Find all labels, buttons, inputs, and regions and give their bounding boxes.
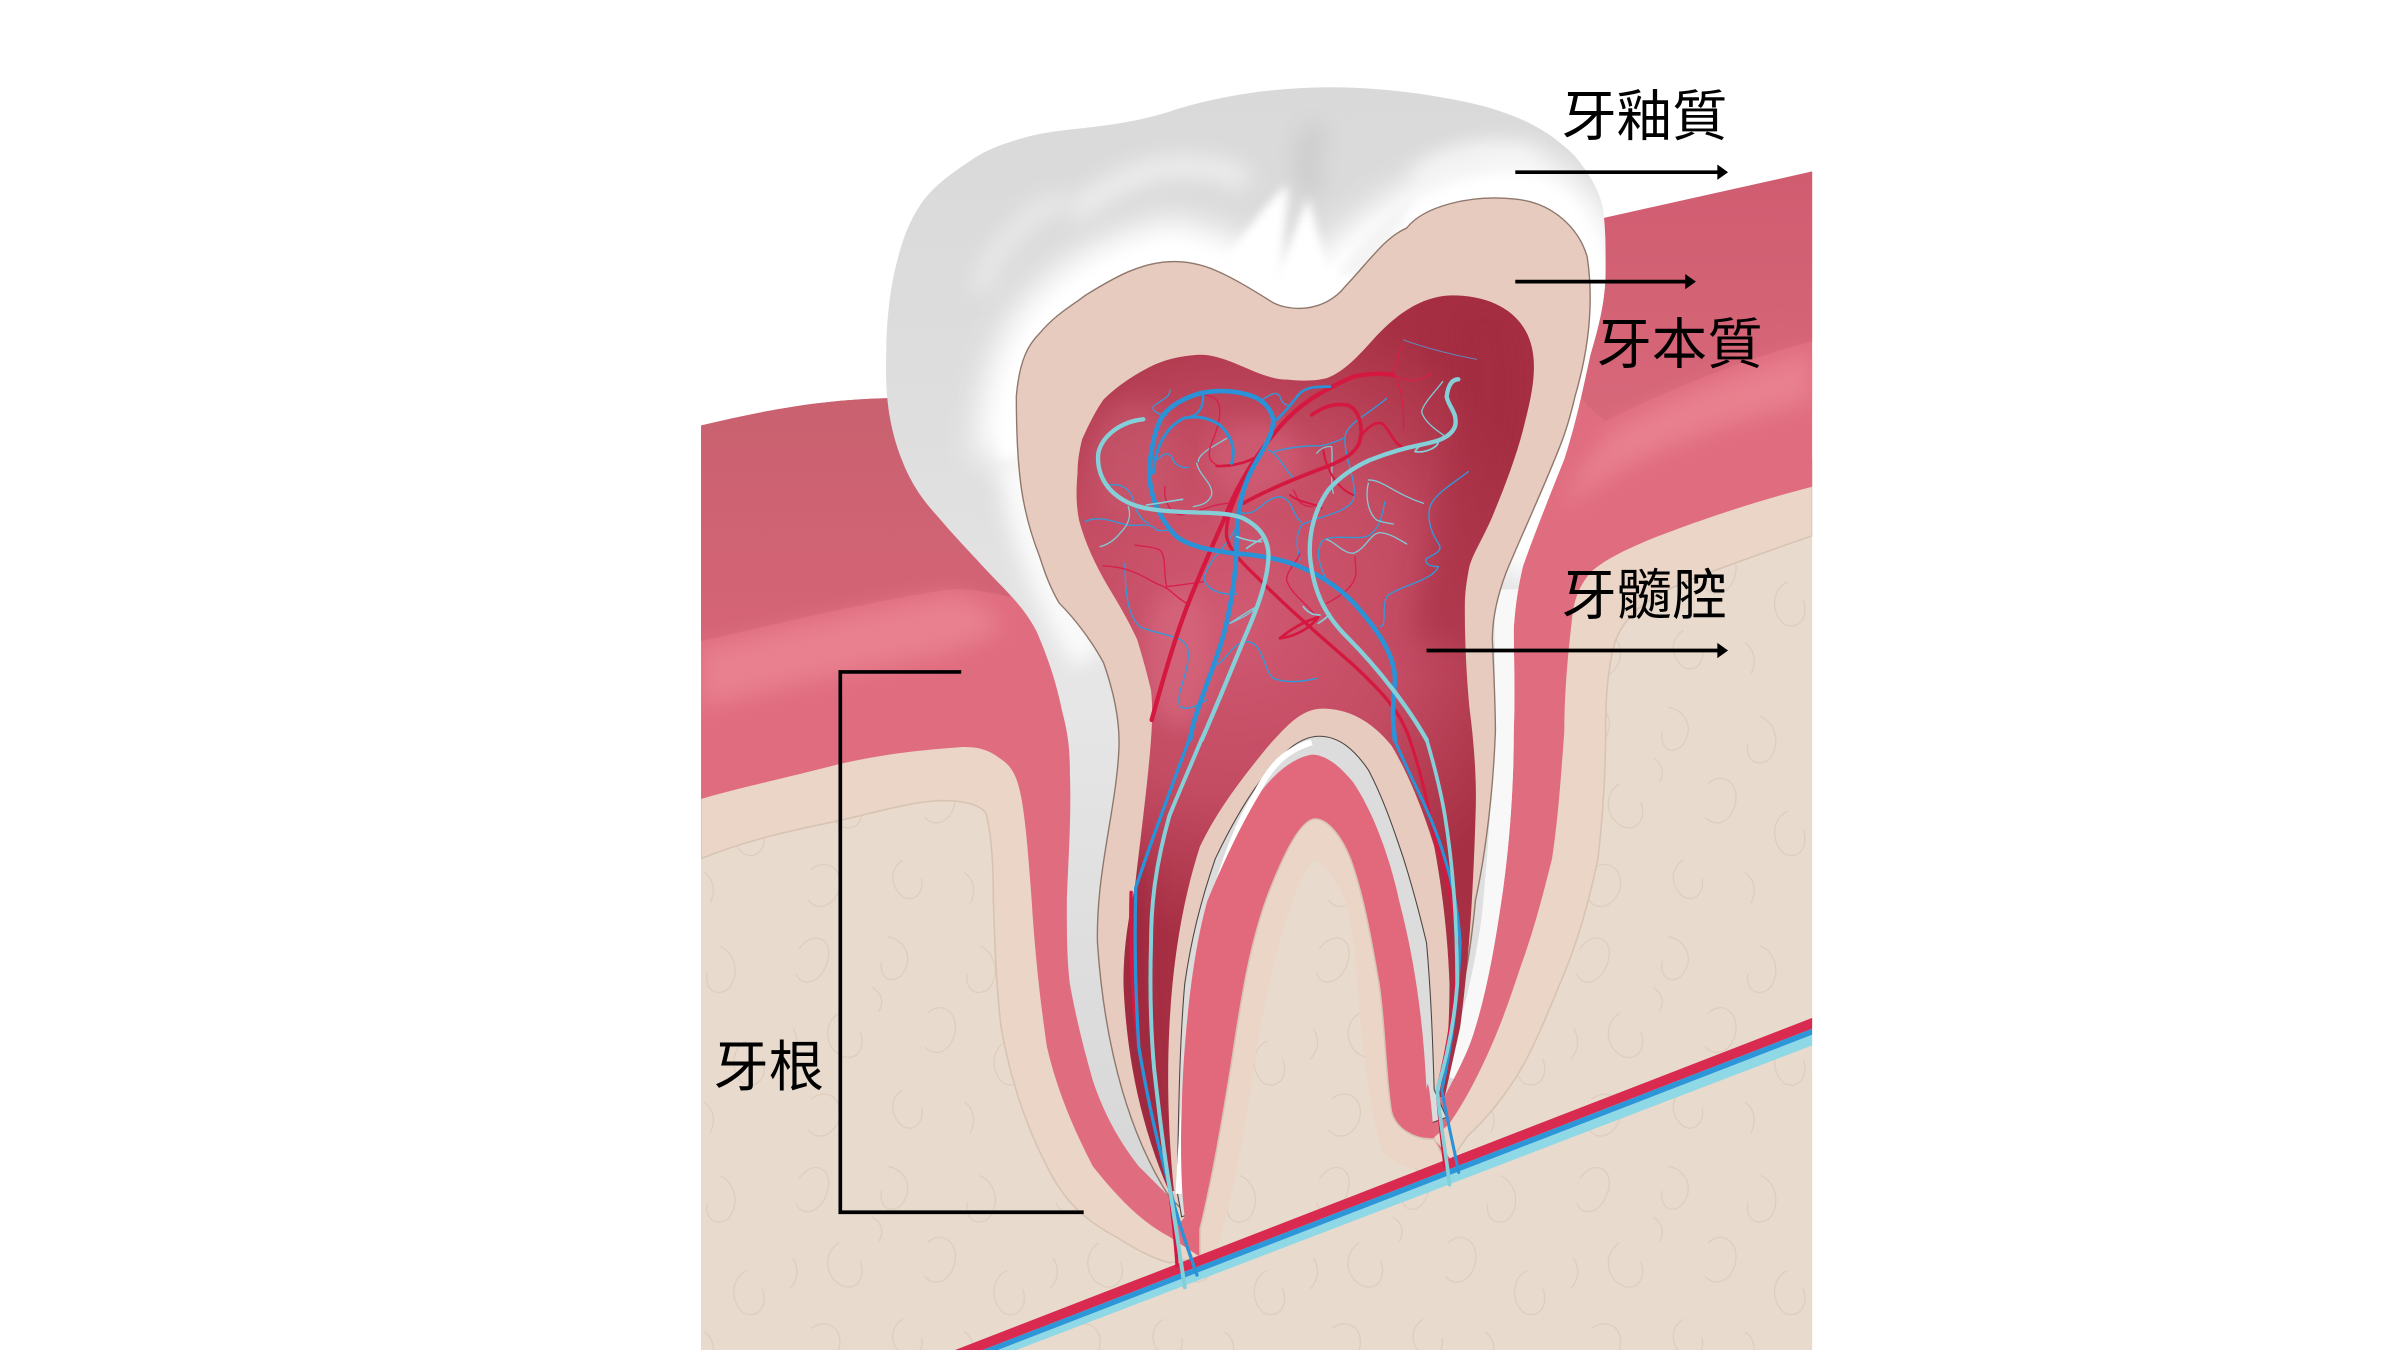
pulp blood vessels and nerves [1085, 340, 1477, 740]
left periosteum layer [701, 747, 1190, 1264]
bracket: root extent [840, 672, 1084, 1212]
left gum crest highlight [701, 596, 1003, 707]
root arch: enamel [1177, 736, 1446, 1217]
tooth anatomy diagram [701, 87, 1812, 1350]
cyan nerve trunks [1098, 379, 1458, 740]
root arch: periosteum [1200, 819, 1454, 1263]
right root blue [1394, 739, 1460, 1172]
blue vein trunks [1149, 387, 1395, 740]
pulp mottled tissue [1090, 306, 1489, 1179]
left gum back face [701, 398, 1010, 641]
label: 牙釉質 enamel: 牙釉質 [1561, 85, 1727, 147]
illustration: tooth in jaw cross-section [701, 87, 1812, 1350]
label: 牙本質 dentin [1515, 274, 1763, 376]
main vessel bundle along jaw [955, 1018, 1812, 1350]
red artery trunks [1152, 374, 1447, 740]
right periosteum layer [1423, 459, 1812, 1169]
left root red [1131, 892, 1177, 1266]
jaw bone [701, 513, 1812, 1350]
root arch: bone [1215, 860, 1812, 1350]
label: 牙根 root: 牙根 [713, 1036, 824, 1098]
right gum back face [1575, 171, 1812, 421]
right gum [1423, 171, 1812, 1140]
thin capillaries [1085, 340, 1477, 708]
enamel highlights [980, 129, 1595, 1079]
right root red [1410, 739, 1457, 1166]
arrow: dentin [1515, 274, 1696, 289]
label: 牙釉質 enamel [1515, 85, 1728, 180]
arrow: enamel [1515, 165, 1728, 180]
white enamel sliver [1179, 742, 1312, 1194]
left root cyan [1150, 739, 1202, 1287]
label: 牙髓腔 pulp cavity: 牙髓腔 [1561, 565, 1727, 627]
label: 牙髓腔 pulp cavity [1427, 565, 1728, 658]
right root cyan [1427, 739, 1457, 1185]
arrow: pulp cavity [1427, 643, 1728, 658]
enamel shell [886, 87, 1606, 1209]
left root blue [1135, 739, 1197, 1275]
pulp chamber [1077, 295, 1534, 1192]
dentin layer [1016, 198, 1590, 1209]
root arch: gum [1169, 755, 1454, 1263]
root arch: dentin [1168, 709, 1449, 1191]
label: 牙根 root [713, 672, 1084, 1212]
label: 牙本質 dentin: 牙本質 [1596, 314, 1763, 376]
root canal vessels [1131, 739, 1460, 1287]
left gum [701, 398, 1182, 1237]
right gum crest highlight [1576, 351, 1812, 492]
